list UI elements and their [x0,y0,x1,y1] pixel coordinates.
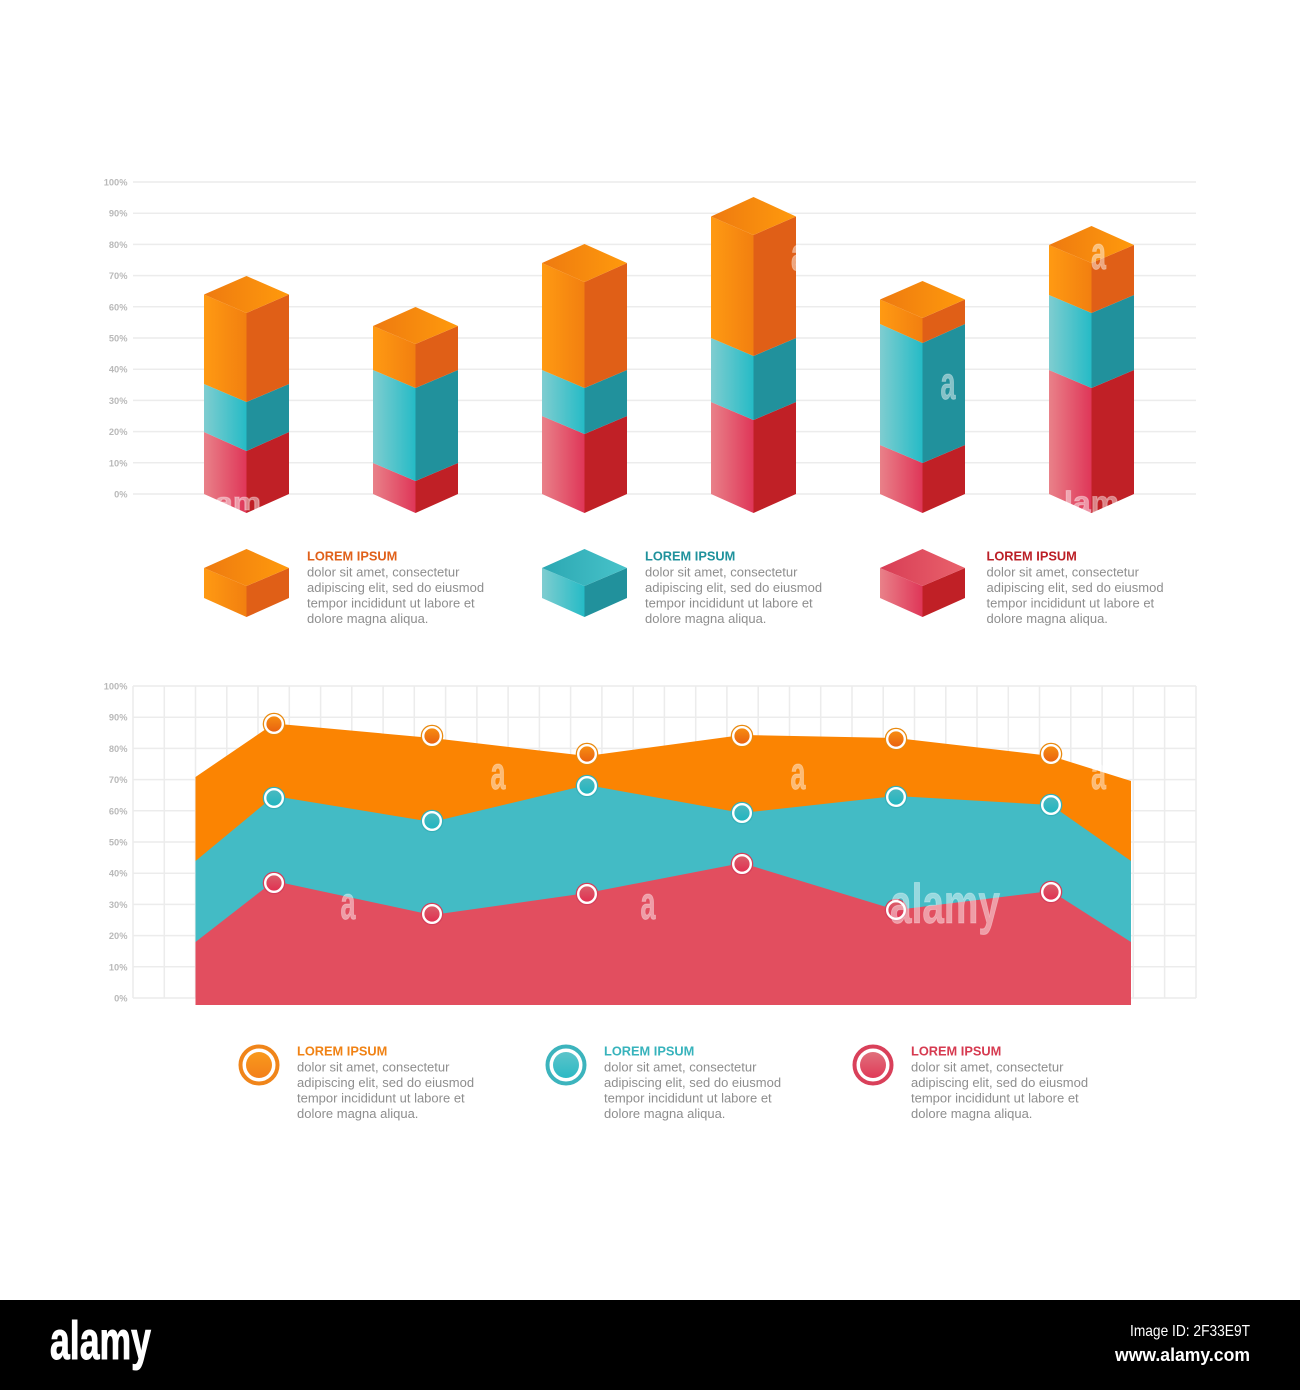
bar 1 [204,276,289,513]
area chart legend: red: tempor incididunt ut labore et [911,1090,1079,1106]
area: red series [196,863,1131,1005]
bar chart y axis labels: 100% [104,178,128,188]
watermarks: a [790,747,806,799]
bar chart y axis labels: 90% [109,209,128,219]
area chart legend: teal: dolore magna aliqua. [604,1106,725,1121]
bar chart legend: orange: tempor incididunt ut labore et [307,596,475,610]
footer image id: Image ID: 2F33E9T [1130,1323,1250,1340]
bar chart legend: orange: dolor sit amet, consectetur [307,564,460,580]
area chart legend: teal: tempor incididunt ut labore et [604,1090,772,1106]
icon: orange ring [240,1046,278,1084]
icon: teal ring [548,1046,584,1084]
footer website: www.alamy.com [1114,1345,1250,1365]
watermarks: alamy [890,872,1000,935]
legend text: orange: LOREM IPSUM [297,1044,387,1058]
area chart legend: red: dolor sit amet, consectetur [911,1060,1064,1074]
icon: orange cube [204,549,289,617]
bar chart y axis labels: 70% [109,271,128,281]
bar chart legend: teal: adipiscing elit, sed do eiusmod [645,580,822,595]
icon: red cube [880,549,965,617]
area chart legend: red: dolore magna aliqua. [911,1106,1032,1121]
bar chart legend: red: dolore magna aliqua. [986,611,1108,626]
bar chart legend: red: adipiscing elit, sed do eiusmod [986,580,1164,595]
watermarks: a [1091,227,1106,279]
red series markers [263,853,1062,925]
bar chart y axis labels: 10% [109,458,128,468]
area chart y axis labels: 30% [109,900,128,910]
area chart y axis labels: 90% [109,713,128,723]
bar chart y axis labels: 80% [109,240,128,250]
legend text: orange: LOREM IPSUM [307,548,397,564]
bar chart y axis labels: 50% [109,334,128,344]
area: orange series [196,724,1131,1005]
watermarks: a [340,877,356,929]
watermarks: lam [1064,486,1119,519]
bar chart gridlines [133,182,1196,494]
bar chart legend: teal: dolore magna aliqua. [645,611,766,626]
area chart legend: teal [548,1044,781,1121]
watermarks: a [791,228,806,280]
bar 4 [711,197,796,513]
area chart y axis labels: 50% [109,838,128,848]
area: teal series [196,785,1131,1005]
watermarks: a [490,747,506,799]
area chart legend: red [854,1044,1088,1121]
watermarks: a [1091,747,1106,799]
bar 3 [542,244,627,513]
area chart y axis labels: 70% [109,775,128,785]
icon: red ring [854,1046,892,1084]
orange series markers [263,713,1062,765]
area chart legend: orange: dolore magna aliqua. [297,1106,418,1121]
legend text: teal: LOREM IPSUM [645,548,735,564]
watermarks: am [215,489,261,516]
footer bar [0,1300,1300,1390]
watermarks: a [940,357,956,409]
bar 2 [373,307,458,513]
bar chart legend: orange: adipiscing elit, sed do eiusmod [307,580,484,595]
area chart legend: orange [240,1044,474,1121]
area chart y axis labels: 100% [104,682,128,692]
bar chart y axis labels: 60% [109,302,128,312]
bar chart y axis labels: 20% [109,427,128,437]
bar chart y axis labels: 0% [114,490,128,500]
watermarks [215,227,1119,935]
watermarks: a [640,877,656,929]
area chart legend: teal: dolor sit amet, consectetur [604,1060,757,1074]
area chart y axis labels: 0% [114,994,128,1004]
bar chart legend: red: tempor incididunt ut labore et [986,596,1155,610]
bar chart legend: teal [542,548,822,626]
panel: stacked area chart [104,682,1196,1005]
bar 5 [880,281,965,513]
bar 6 [1049,226,1134,513]
panel: stacked bar chart [104,178,1196,513]
bar chart legend: teal: tempor incididunt ut labore et [645,596,813,610]
area chart legend: orange: adipiscing elit, sed do eiusmod [297,1075,474,1090]
bar chart y axis labels: 40% [109,365,128,375]
teal series markers [263,775,1062,832]
bar chart y axis labels: 30% [109,396,128,406]
bar chart y axis labels [104,178,128,500]
area chart y axis labels: 10% [109,962,128,972]
legend text: red: LOREM IPSUM [911,1044,1001,1058]
area chart y axis labels: 80% [109,744,128,754]
icon: teal cube [542,549,627,617]
area chart legend: orange: dolor sit amet, consectetur [297,1060,450,1074]
area chart y axis labels: 20% [109,931,128,941]
bar chart legend: orange [204,548,484,626]
bar chart legend: red [880,548,1164,626]
area chart grid [133,686,1196,998]
legend text: teal: LOREM IPSUM [604,1044,694,1058]
area chart legend: teal: adipiscing elit, sed do eiusmod [604,1075,781,1090]
footer logo: alamy [50,1311,151,1371]
bar chart legend: red: dolor sit amet, consectetur [986,564,1140,580]
bar chart legend: teal: dolor sit amet, consectetur [645,564,798,580]
bar chart legend: orange: dolore magna aliqua. [307,611,428,626]
area chart y axis labels: 60% [109,806,128,816]
area chart y axis labels: 40% [109,869,128,879]
area chart y axis labels [104,682,128,1004]
area chart legend: orange: tempor incididunt ut labore et [297,1090,465,1106]
legend text: red: LOREM IPSUM [986,548,1077,564]
area chart legend: red: adipiscing elit, sed do eiusmod [911,1075,1088,1090]
